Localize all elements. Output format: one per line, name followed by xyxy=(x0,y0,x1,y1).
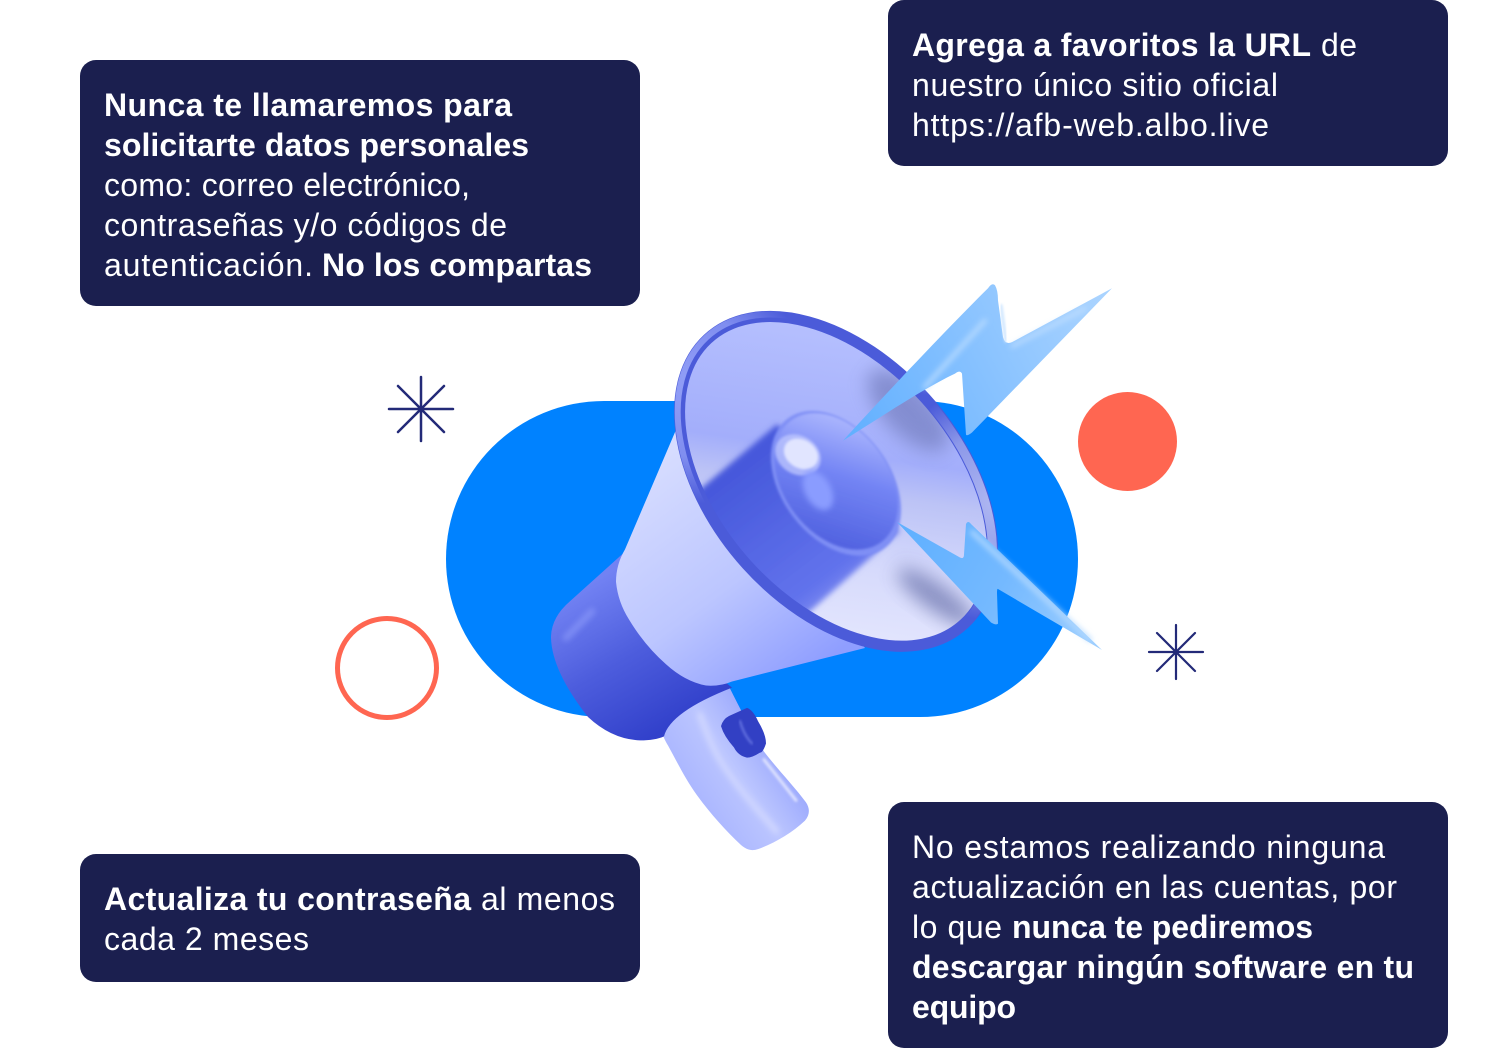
text: bookmark official URL: nuestro único sitio oficial xyxy=(912,67,1278,103)
megaphone handle xyxy=(662,687,809,850)
panel: never share personal data xyxy=(80,60,640,306)
megaphone cone body xyxy=(616,427,865,686)
text: never share personal data: contraseñas y/o códigos de xyxy=(104,207,507,243)
icon: coral circle xyxy=(1078,392,1177,491)
text: no software downloads: actualización en las cuentas, por xyxy=(912,869,1397,905)
text: bookmark official URL xyxy=(912,27,1357,143)
text: no software downloads: nunca te pediremos xyxy=(1012,909,1313,945)
megaphone cone interior xyxy=(685,322,986,641)
megaphone back cylinder xyxy=(551,553,732,740)
icon: megaphone xyxy=(551,256,1112,850)
text: update password: Actualiza tu contraseña xyxy=(104,881,471,917)
speaker dome xyxy=(744,386,928,581)
text: never share personal data: No los compartas xyxy=(322,247,592,283)
text: no software downloads: descargar ningún software en tu xyxy=(912,949,1414,985)
panel: update password xyxy=(80,854,640,982)
icon: right asterisk xyxy=(1149,625,1203,679)
text: bookmark official URL: https://afb-web.albo.live xyxy=(912,107,1269,143)
text: update password: al menos xyxy=(481,881,615,917)
icon: coral ring xyxy=(338,618,436,718)
text: bookmark official URL: Agrega a favoritos la URL xyxy=(912,27,1311,63)
lightning bolt lower xyxy=(897,522,1102,650)
panel: bookmark official URL xyxy=(888,0,1448,166)
text: never share personal data: solicitarte datos personales xyxy=(104,127,529,163)
icon: left asterisk xyxy=(389,377,453,441)
megaphone rim xyxy=(678,315,994,648)
text: update password: cada 2 meses xyxy=(104,921,309,957)
text: update password xyxy=(104,881,615,957)
text: never share personal data xyxy=(104,87,592,283)
text: no software downloads: No estamos realizando ninguna xyxy=(912,829,1385,865)
text: bookmark official URL: de xyxy=(1321,27,1357,63)
megaphone trigger button xyxy=(721,708,766,758)
text: never share personal data: autenticación. xyxy=(104,247,313,283)
text: never share personal data: Nunca te llamaremos para xyxy=(104,87,512,123)
lightning bolt upper xyxy=(843,284,1112,441)
text: never share personal data: como: correo electrónico, xyxy=(104,167,470,203)
blue pill background xyxy=(446,401,1078,717)
text: no software downloads: equipo xyxy=(912,989,1016,1025)
text: no software downloads: lo que xyxy=(912,909,1002,945)
panel: no software downloads xyxy=(888,802,1448,1048)
text: no software downloads xyxy=(912,829,1414,1025)
